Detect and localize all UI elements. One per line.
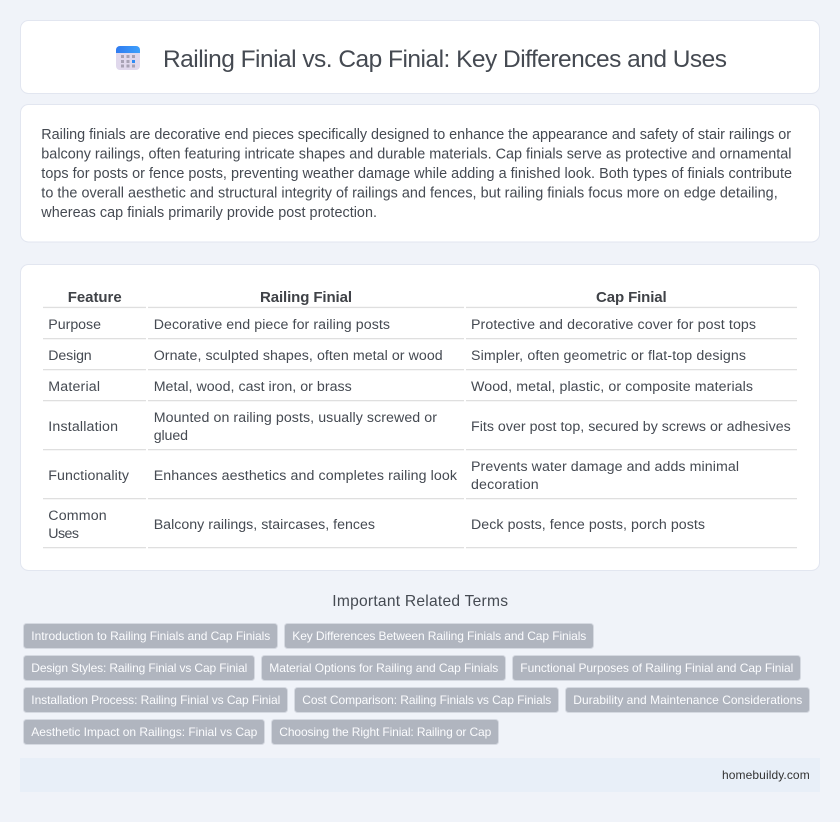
row: installation: Fits over post top, secured by screws or adhesives [471, 419, 791, 435]
row: functionality [48, 459, 739, 493]
tag list: related terms: Choosing the Right Finial: Railing or Cap [279, 725, 492, 739]
row: common uses: Deck posts, fence posts, porch posts [471, 517, 705, 533]
tag list: related terms: Functional Purposes of Railing Finial and Cap Finial [520, 661, 793, 675]
table header row: Railing Finial [260, 289, 352, 306]
tag list: related terms: Durability and Maintenance Considerations [573, 693, 802, 707]
text block: introduction paragraph: Railing finials are decorative end pieces specifically designed to enhance the appearance and safety of stair railings or [41, 127, 791, 143]
tag list: related terms: Installation Process: Railing Finial vs Cap Finial [31, 693, 280, 707]
tag list: related terms [24, 624, 810, 744]
text block: introduction paragraph: balcony railings, often featuring intricate shapes and durable materials. Cap finials serve as protective and ornamental [41, 146, 792, 162]
tag list: related terms: Introduction to Railing Finials and Cap Finials [31, 629, 270, 643]
footer [20, 758, 820, 792]
row: material: Metal, wood, cast iron, or brass [154, 379, 352, 395]
row: installation: glued [154, 428, 188, 444]
row: installation [48, 410, 791, 444]
row: functionality: Prevents water damage and adds minimal [471, 459, 739, 475]
row: design [48, 348, 746, 364]
row: functionality: decoration [471, 477, 539, 493]
table header row [68, 289, 667, 306]
tag list: related terms: Design Styles: Railing Finial vs Cap Finial [31, 661, 247, 675]
text block: introduction paragraph: to the overall aesthetic and structural integrity of railings and fences, but railing finials focus more on edge detailing, [41, 186, 778, 202]
row: functionality: Functionality [48, 468, 130, 484]
row: purpose [48, 317, 756, 333]
row: purpose: Decorative end piece for railing posts [154, 317, 390, 333]
row: common uses: Uses [48, 526, 79, 542]
row: design: Simpler, often geometric or flat-top designs [471, 348, 746, 364]
row: installation: Mounted on railing posts, usually screwed or [154, 410, 437, 426]
row: material: Material [48, 379, 100, 395]
heading: related terms: Important Related Terms [332, 593, 508, 610]
row: functionality: Enhances aesthetics and completes railing look [154, 468, 458, 484]
tag list: related terms: Aesthetic Impact on Railings: Finial vs Cap [31, 725, 258, 739]
panel: introduction [20, 104, 820, 242]
tag list: related terms: Key Differences Between Railing Finials and Cap Finials [292, 629, 586, 643]
row: common uses [48, 508, 705, 542]
icon: calendar [116, 46, 140, 70]
title: Railing Finial vs. Cap Finial: Key Differences and Uses [163, 46, 727, 73]
tag list: related terms: Cost Comparison: Railing Finials vs Cap Finials [302, 693, 551, 707]
table header row: Feature [68, 289, 122, 306]
row: purpose: Protective and decorative cover for post tops [471, 317, 756, 333]
row: installation: Installation [48, 419, 118, 435]
text block: introduction paragraph: tops for posts or fence posts, preventing weather damage while adding a finished look. Both types of finials contribute [41, 166, 792, 182]
row: common uses: Balcony railings, staircases, fences [154, 517, 375, 533]
row: purpose: Purpose [48, 317, 101, 333]
footer: homebuildy.com [722, 768, 810, 782]
row: design: Design [48, 348, 92, 364]
row: material [48, 379, 753, 395]
panel: page header [20, 20, 820, 94]
panel: comparison table [20, 264, 820, 570]
row: material: Wood, metal, plastic, or composite materials [471, 379, 753, 395]
text block: introduction paragraph [40, 127, 792, 221]
row: design: Ornate, sculpted shapes, often metal or wood [154, 348, 443, 364]
table header row: Cap Finial [596, 289, 667, 306]
text block: introduction paragraph: whereas cap finials primarily provide post protection. [40, 205, 377, 221]
row: common uses: Common [48, 508, 107, 524]
tag list: related terms: Material Options for Railing and Cap Finials [269, 661, 498, 675]
